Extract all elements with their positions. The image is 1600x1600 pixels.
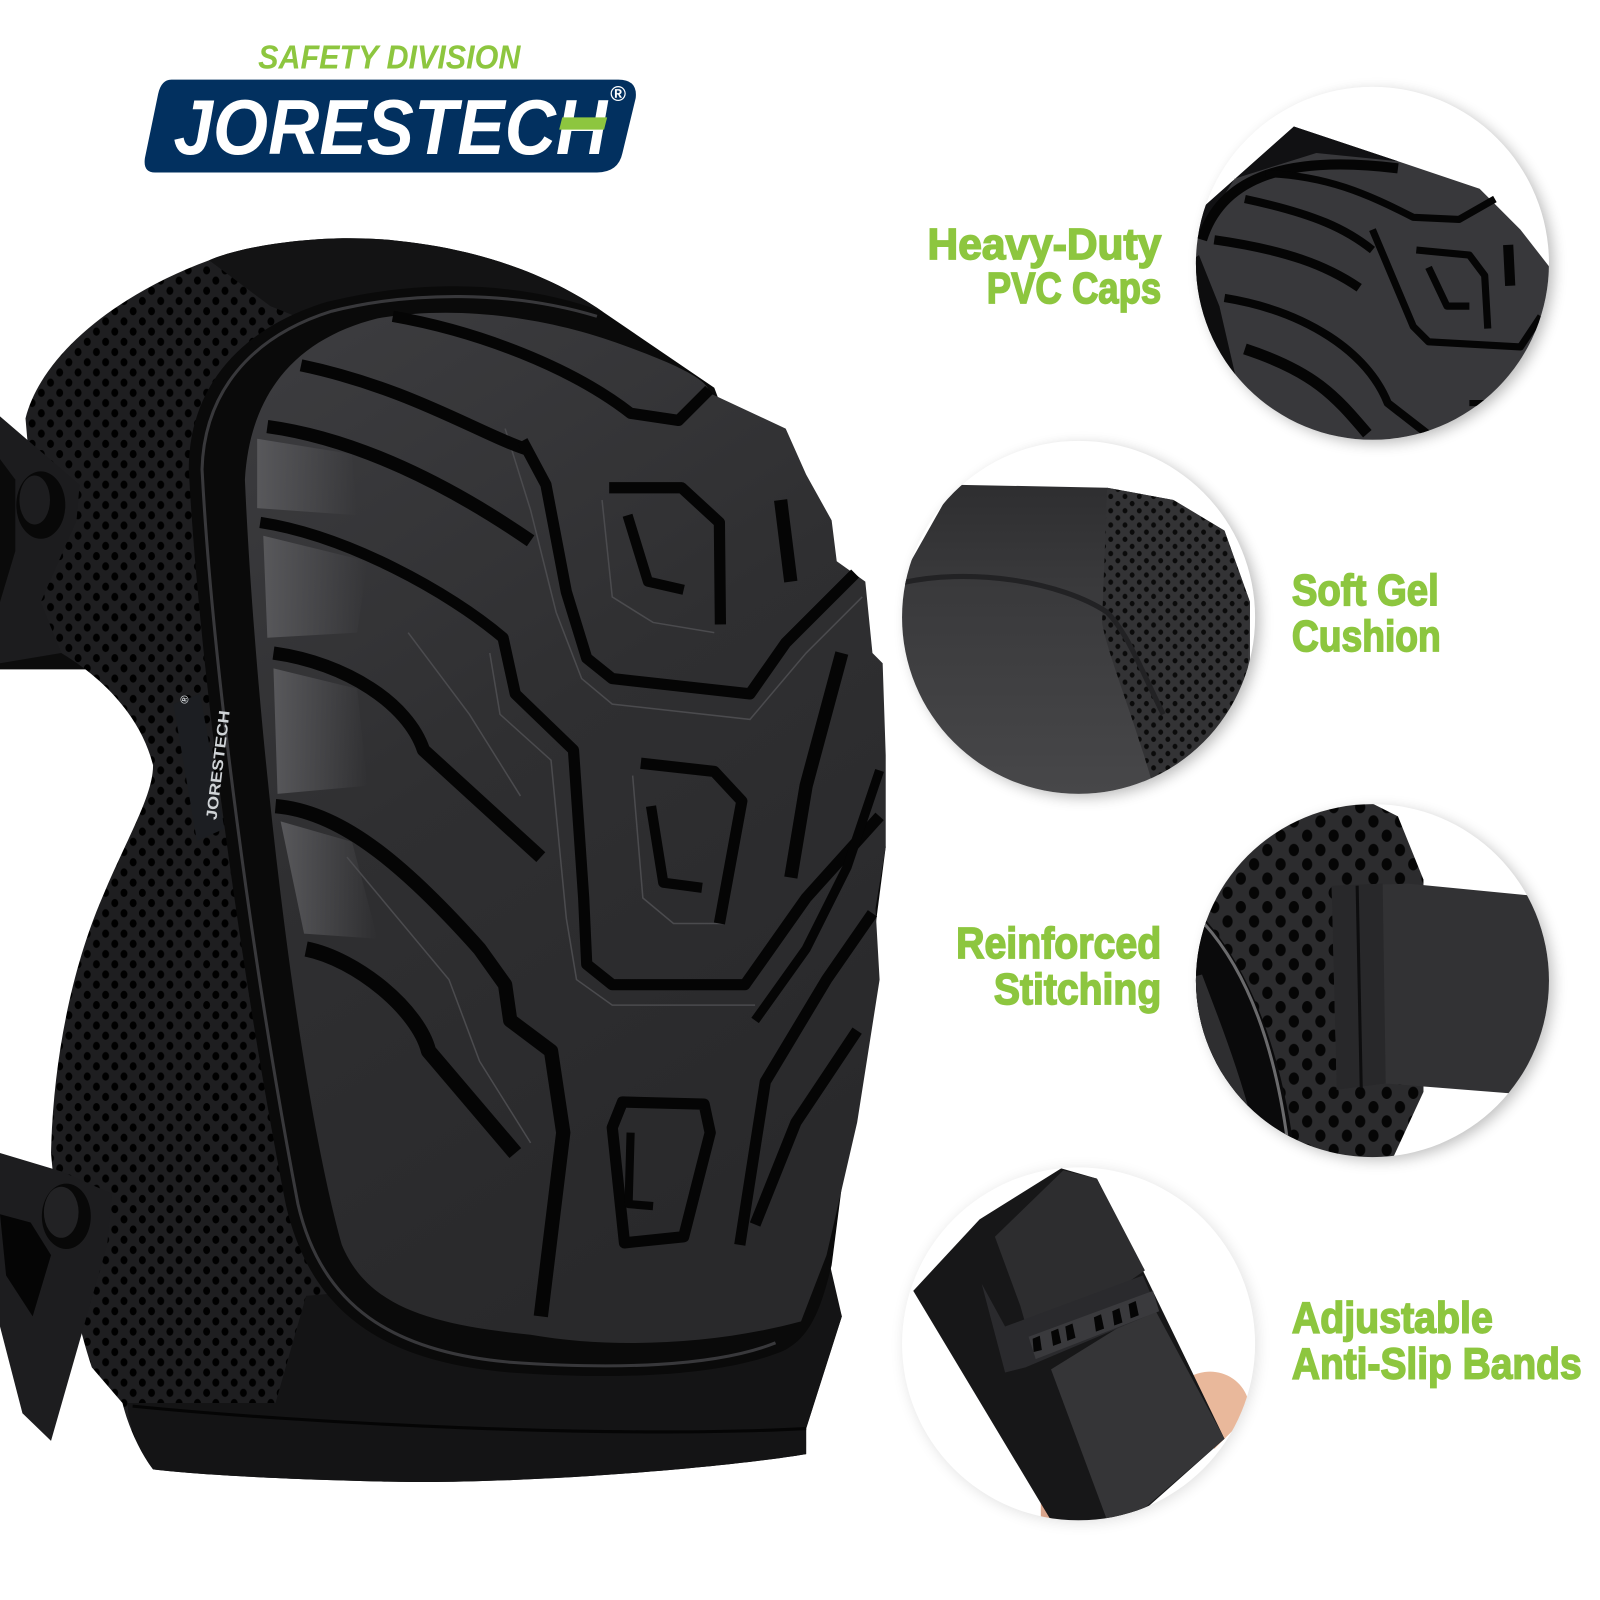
- lower band: [1051, 1306, 1224, 1520]
- cap window lower: [612, 1102, 710, 1243]
- logo: [145, 39, 636, 172]
- circle shadow: [1202, 809, 1553, 1160]
- stitching close-up: [1184, 801, 1556, 1163]
- cap secondary contours: [347, 429, 862, 1143]
- cap window middle: [641, 763, 742, 923]
- logo registered mark: ®: [610, 82, 626, 106]
- bottom strap clip: [0, 1153, 112, 1441]
- feature: soft gel cushion: [888, 441, 1441, 806]
- main knee pad photo: [0, 238, 886, 1482]
- brand tag: ®: [179, 694, 192, 704]
- cap grooves: [260, 316, 880, 1316]
- finger: [1194, 1372, 1247, 1449]
- circle disc: [1196, 804, 1549, 1157]
- label: Soft Gel: [1292, 566, 1439, 615]
- upper band: [995, 1170, 1145, 1320]
- top strap clip: [0, 416, 80, 663]
- back band: [913, 1168, 1224, 1520]
- logo wordmark: JORESTECH: [173, 85, 609, 171]
- label: Reinforced: [956, 919, 1161, 968]
- cap shell: [245, 313, 886, 1343]
- label: Heavy-Duty: [928, 220, 1162, 269]
- left strap: [0, 631, 92, 669]
- cap outer rim: [189, 286, 886, 1376]
- buckle: [982, 1276, 1159, 1372]
- band close-up: [913, 1168, 1250, 1531]
- feature: reinforced stitching: [956, 801, 1556, 1163]
- bottom pad seam: [133, 1406, 806, 1432]
- logo badge: [145, 80, 636, 172]
- circle shadow: [904, 1169, 1257, 1522]
- label: Adjustable: [1292, 1294, 1493, 1343]
- label line 2: PVC Caps: [987, 264, 1161, 313]
- logo tagline: Safety Division: SAFETY DIVISION: [258, 39, 521, 76]
- bottom fabric pad: [128, 1250, 842, 1482]
- circle disc: [902, 1167, 1255, 1520]
- label line 2: Stitching: [994, 965, 1161, 1014]
- top fabric trim: [209, 238, 602, 316]
- circle disc: [902, 441, 1255, 794]
- circle shadow: [1202, 92, 1553, 443]
- mesh body: [26, 238, 842, 1482]
- circle disc: [1196, 87, 1549, 440]
- cap window upper: [609, 488, 720, 624]
- feature: adjustable anti-slip bands: [902, 1167, 1582, 1531]
- label line 2: Cushion: [1292, 612, 1441, 661]
- feature: heavy-duty PVC caps: [928, 87, 1561, 449]
- brand tag: [173, 694, 234, 841]
- brand tag: JORESTECH: [203, 709, 234, 821]
- circle shadow: [908, 446, 1259, 797]
- logo green bar: [559, 117, 607, 130]
- cap left gloss bands: [257, 439, 378, 939]
- cap rim highlight: [202, 297, 776, 1366]
- cushion close-up: [888, 485, 1250, 806]
- cap close-up: [1184, 127, 1561, 449]
